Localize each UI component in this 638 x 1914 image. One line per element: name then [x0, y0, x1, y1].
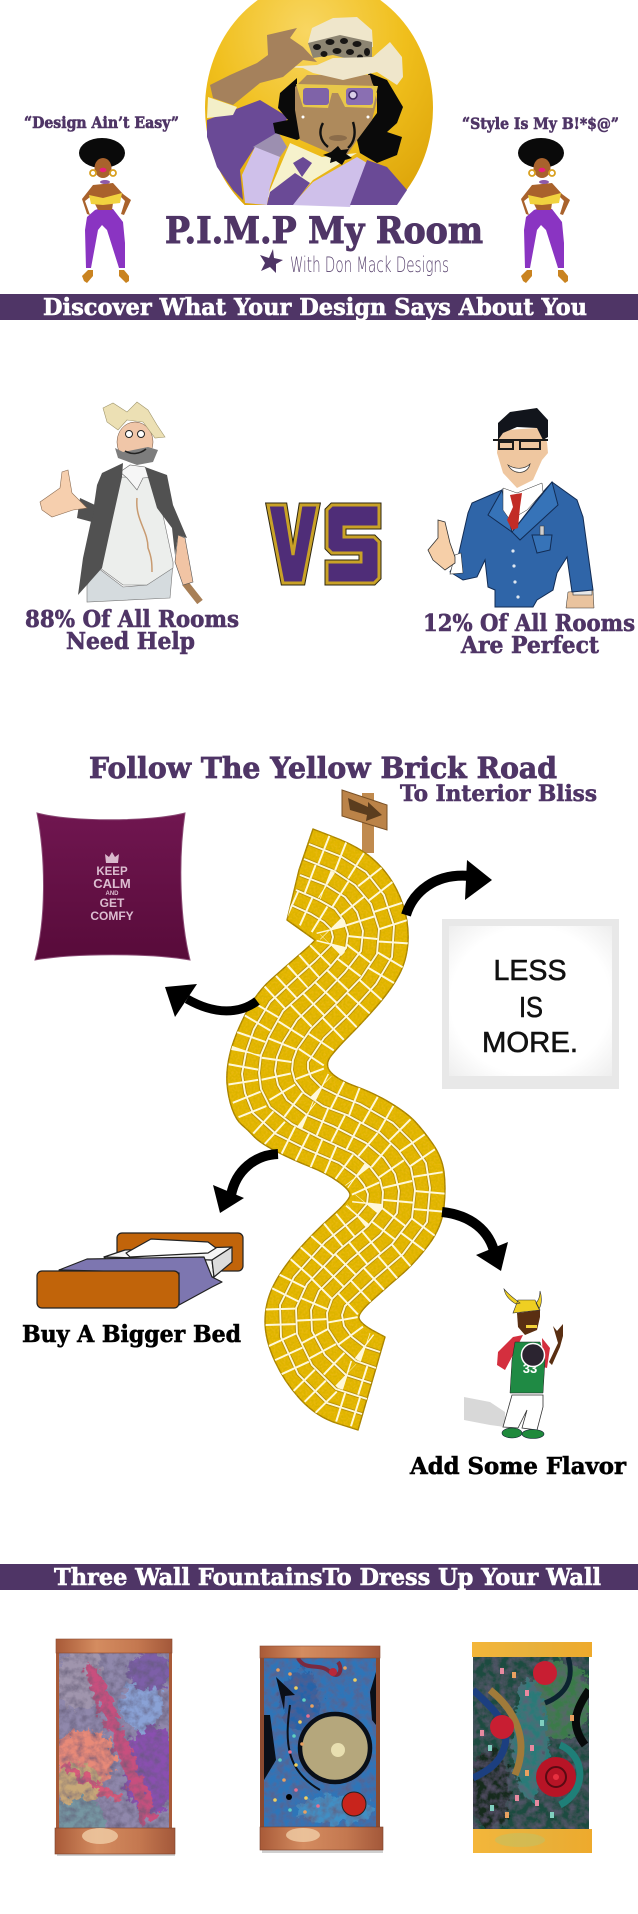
glasses	[493, 440, 548, 449]
pants	[503, 1395, 543, 1430]
tie	[507, 493, 522, 530]
clock	[522, 1344, 544, 1366]
title: P.I.M.P My Room	[165, 210, 483, 252]
hair	[273, 72, 403, 163]
poster text	[482, 955, 578, 1059]
heading: yellow brick road: Follow The Yellow Brick Road	[89, 751, 557, 785]
caption: add some flavor: Add Some Flavor	[409, 1453, 627, 1480]
lapels and seams	[488, 482, 558, 540]
buttons	[511, 549, 520, 599]
heading: yellow brick road: To Interior Bliss	[400, 781, 597, 807]
caption: buy a bigger bed: Buy A Bigger Bed	[22, 1321, 241, 1348]
poster text: LESS	[494, 955, 566, 987]
pillow text: GET	[100, 896, 125, 910]
lower hand	[566, 590, 594, 608]
collar	[120, 465, 155, 490]
arm right	[175, 535, 193, 585]
jacket	[207, 100, 407, 207]
pocket	[532, 526, 552, 553]
yellow brick road	[227, 829, 445, 1430]
shadow	[464, 1397, 505, 1427]
sunglasses	[296, 84, 378, 108]
figure: shabby man	[40, 402, 200, 602]
cuff	[450, 553, 463, 574]
figure: woman right	[518, 138, 570, 283]
trough	[260, 1827, 383, 1850]
pillow text: COMFY	[90, 909, 134, 923]
number: 33	[523, 1361, 537, 1376]
caption: 12 percent: Are Perfect	[460, 632, 599, 659]
helmet	[504, 1289, 541, 1313]
icon: star	[260, 249, 283, 273]
suit	[450, 482, 593, 607]
eyes and mouth	[125, 430, 146, 453]
collar	[503, 483, 543, 520]
crown icon	[105, 852, 119, 863]
beard	[115, 447, 158, 465]
icon: bed	[37, 1233, 243, 1308]
shirt	[100, 477, 173, 585]
top bar	[472, 1642, 592, 1657]
top bar	[56, 1639, 172, 1653]
figure: suited man	[428, 408, 594, 608]
VS emblem	[268, 505, 379, 583]
earrings	[302, 116, 370, 118]
jersey	[510, 1342, 545, 1393]
pants	[87, 563, 173, 602]
icon: signpost	[342, 790, 387, 853]
goatee and mouth	[320, 122, 355, 165]
caption: 88 percent: 88% Of All Rooms	[25, 606, 239, 633]
poster: less is more	[442, 919, 619, 1089]
arrow: to less is more	[406, 860, 492, 915]
quote: Design Ain't Easy: “Design Ain’t Easy”	[24, 113, 179, 132]
top bar	[260, 1646, 380, 1658]
thumbs up hand	[428, 520, 455, 570]
fountain 3: green abstract	[472, 1642, 592, 1853]
banner: three wall fountains: Three Wall FountainsTo Dress Up Your Wall	[54, 1564, 601, 1591]
hand	[40, 470, 87, 517]
figure: flavor character	[464, 1289, 563, 1438]
hair	[498, 408, 548, 440]
cowboy hat	[283, 17, 403, 85]
trough	[55, 1828, 175, 1854]
green art	[473, 1657, 589, 1829]
sleeves	[497, 1335, 523, 1370]
banner: discover: Discover What Your Design Says About You	[43, 294, 587, 321]
hat	[103, 402, 165, 438]
pillow text: CALM	[93, 876, 131, 891]
fountain 2: blue abstract	[260, 1646, 384, 1853]
fountain 1: marble	[54, 1638, 176, 1856]
smile	[508, 464, 530, 472]
blue art	[264, 1658, 376, 1827]
caption: 12 percent	[423, 610, 635, 659]
heading: yellow brick road	[89, 751, 597, 807]
pillow: keep calm	[35, 813, 190, 960]
marble art	[59, 1653, 169, 1828]
pillow text: AND	[106, 891, 119, 897]
pillow text: KEEP	[96, 866, 128, 878]
watch	[573, 590, 592, 595]
quote: Style Is My B!*$@: “Style Is My B!*$@”	[462, 114, 619, 133]
caption: 88 percent	[25, 606, 239, 655]
arm and hand	[207, 28, 317, 118]
face	[117, 422, 153, 462]
arrow: to bed	[213, 1154, 278, 1213]
arrow: to flavor	[442, 1212, 508, 1271]
poster text: MORE.	[482, 1027, 578, 1059]
jacket	[77, 463, 187, 595]
face	[295, 75, 377, 155]
face	[497, 428, 548, 488]
pillow text	[90, 866, 134, 923]
figure: woman left	[79, 138, 131, 283]
caption: 88 percent: Need Help	[66, 628, 195, 655]
gold oval background	[205, 0, 433, 205]
subtitle: With Don Mack Designs	[290, 253, 449, 277]
poster text: IS	[519, 992, 543, 1024]
arrow: to pillow	[165, 984, 257, 1017]
shirt tear	[137, 498, 152, 572]
header: host portrait	[205, 0, 433, 207]
arm and hand	[549, 1324, 563, 1365]
bottom bar	[473, 1829, 592, 1853]
shoes	[502, 1428, 544, 1438]
head	[517, 1310, 540, 1335]
stick	[185, 583, 200, 602]
